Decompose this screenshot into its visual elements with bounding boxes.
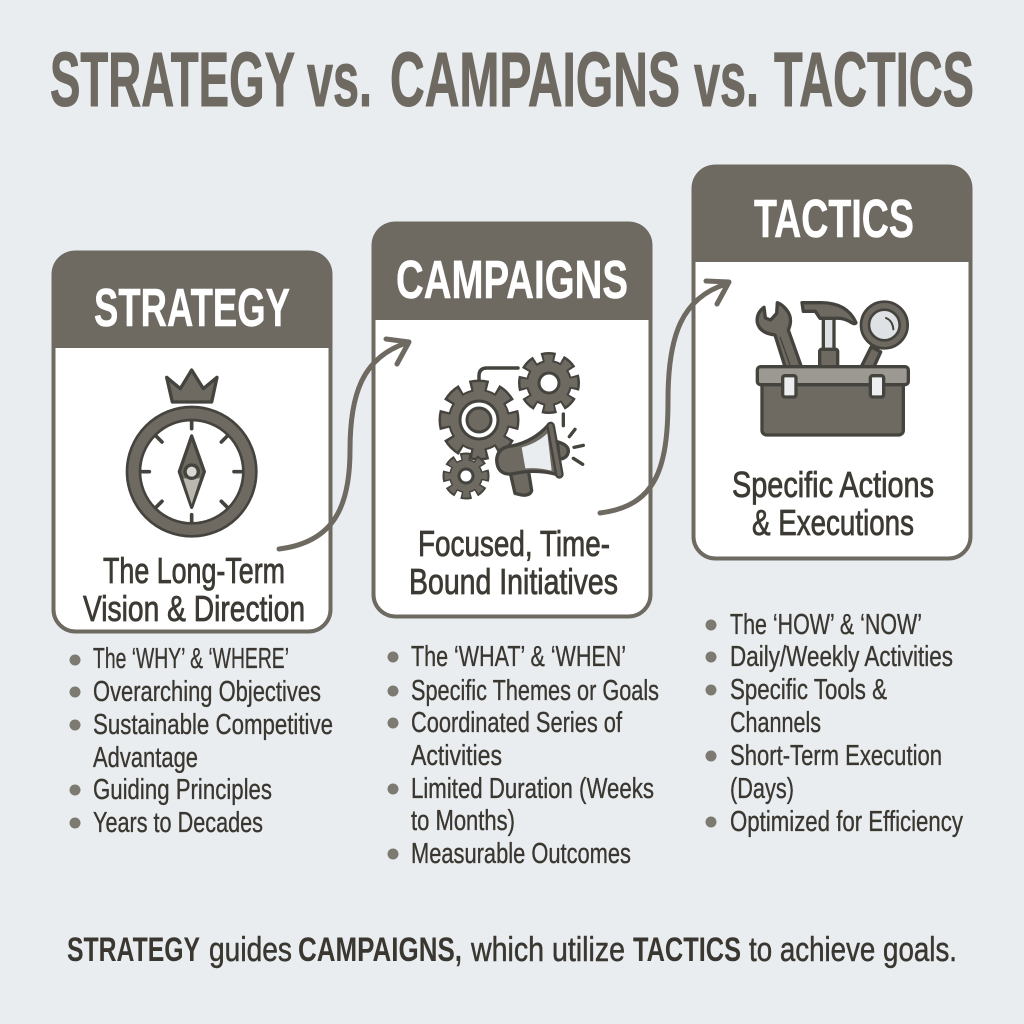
small gear [447,457,485,495]
large gear [446,387,512,453]
bullet: duration: to Months) [411,805,515,837]
bullet: tools and channels: Channels [730,707,821,739]
list: tactics bullets [706,609,963,838]
campaigns subtitle: Bound Initiatives [409,561,618,602]
panel: strategy [52,251,332,632]
campaigns subtitle [409,523,618,602]
bullet: tools and channels [706,674,887,739]
bullet: activities: Daily/Weekly Activities [730,641,953,673]
list: campaigns bullets [388,641,659,870]
arrow: campaigns to tactics [600,281,729,513]
strategy subtitle: The Long-Term [103,550,285,591]
bullet: why and where: The ‘WHY’ & ‘WHERE’ [93,643,289,675]
bullet: short-term execution: Short-Term Execution [730,740,942,772]
title: CAMPAIGNS [390,37,680,123]
megaphone [497,414,583,495]
bullet: principles: Guiding Principles [93,774,272,806]
footer statement: which utilize [470,931,625,969]
list: strategy bullets [70,643,333,839]
bullet: duration [388,773,654,837]
bullet: time frame [70,807,263,839]
tactics header [692,165,972,262]
strategy subtitle [83,550,305,629]
bullet: tools and channels: Specific Tools & [730,674,887,706]
bullet: short-term execution: (Days) [730,773,794,805]
footer statement: to achieve goals. [749,931,957,969]
footer statement [67,931,957,969]
bullet: coordinated series: Coordinated Series of [411,707,623,739]
bullet: short-term execution [706,740,942,805]
title: vs. [307,37,372,123]
bullet: principles [70,774,272,806]
title: vs. [694,37,759,123]
icon: compass with crown [127,370,256,536]
footer statement: STRATEGY [67,931,200,969]
bullet: outcomes [388,838,631,870]
bullet: what and when: The ‘WHAT’ & ‘WHEN’ [411,641,626,673]
arrow: strategy to campaigns [279,339,409,549]
tactics subtitle: Specific Actions [732,464,934,505]
footer statement: CAMPAIGNS, [298,931,462,969]
title [50,37,974,123]
bullet: outcomes: Measurable Outcomes [411,838,631,870]
bullet: what and when [388,641,626,673]
bullet: why and where [70,643,289,675]
bullet: themes: Specific Themes or Goals [411,675,659,707]
tactics subtitle [732,464,934,543]
footer statement: TACTICS [633,931,741,969]
tactics heading: TACTICS [754,189,914,249]
bullet: advantage: Advantage [93,742,198,774]
icon: gears and megaphone [446,358,583,495]
campaigns heading: CAMPAIGNS [396,250,628,310]
bullet: how and now [706,609,922,641]
bullet: advantage [70,709,333,774]
strategy heading: STRATEGY [94,278,290,338]
bullet: coordinated series [388,707,623,772]
bullet: advantage: Sustainable Competitive [93,709,333,741]
panel: tactics [692,165,972,558]
campaigns subtitle: Focused, Time- [418,523,610,564]
bullet: time frame: Years to Decades [93,807,263,839]
strategy subtitle: Vision & Direction [83,588,305,629]
campaigns header [372,222,652,320]
icon: toolbox with wrench, hammer and magnifier [757,302,908,435]
title: STRATEGY [50,37,295,123]
panel: campaigns [372,222,652,616]
upper gear [524,358,574,408]
bullet: themes [388,675,659,707]
strategy header [52,251,332,348]
bullet: objectives: Overarching Objectives [93,676,321,708]
bullet: duration: Limited Duration (Weeks [411,773,654,805]
bullet: how and now: The ‘HOW’ & ‘NOW’ [730,609,922,641]
footer statement: guides [209,931,292,969]
tactics subtitle: & Executions [752,502,914,543]
bullet: coordinated series: Activities [411,740,502,772]
